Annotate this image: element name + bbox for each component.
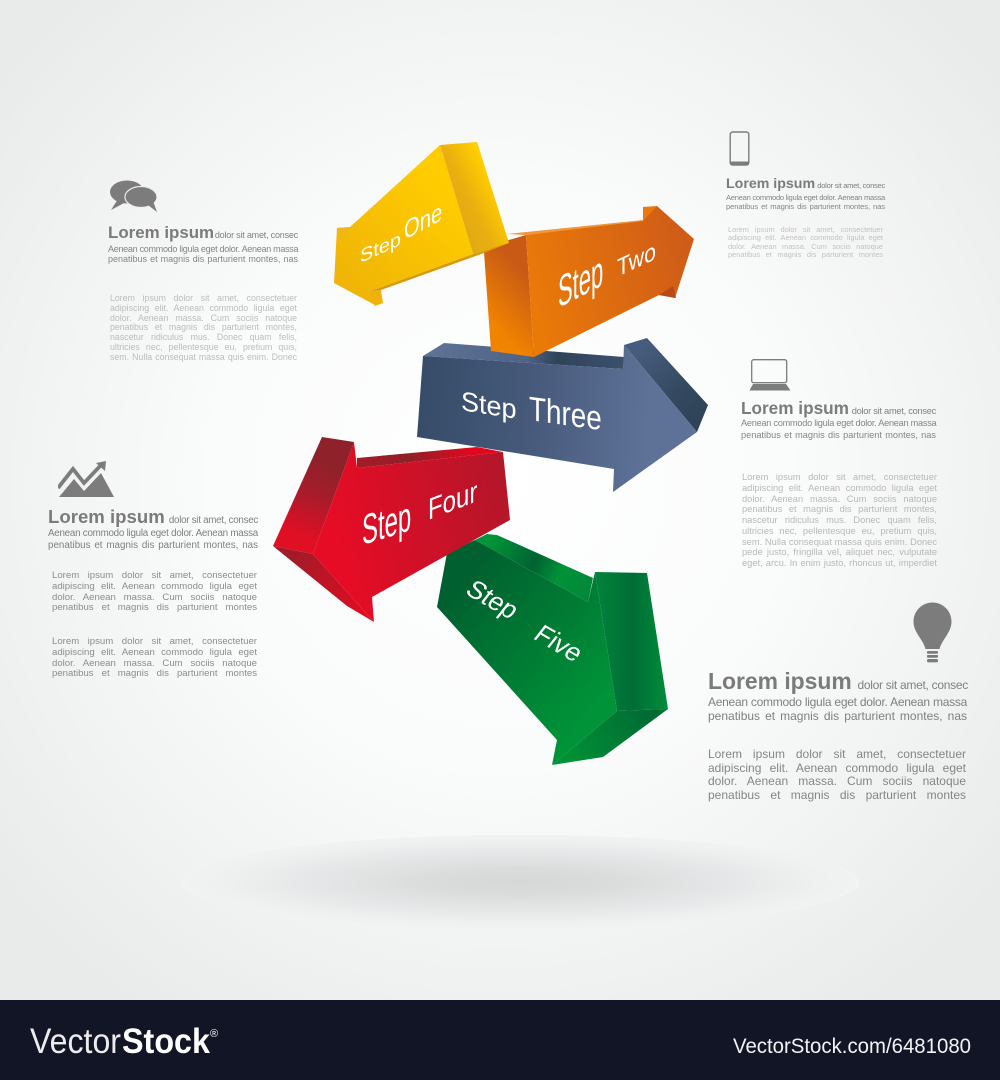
body text: penatibus et magnis dis parturient montes (52, 668, 257, 679)
heading (741, 398, 936, 418)
intro text (48, 528, 258, 551)
body text: penatibus et magnis dis parturient montes (708, 788, 966, 802)
text block: light bulb (708, 602, 968, 802)
icon: mountain chart (58, 461, 114, 497)
label: step three: Step (461, 385, 517, 425)
body text: adipiscing elit. Aenean commodo ligula eget (110, 303, 297, 313)
body text: adipiscing elit. Aenean commodo ligula eget (708, 761, 966, 775)
body text: nascetur ridiculus mus. Donec quam felis, (742, 515, 937, 525)
text block: phone (726, 131, 886, 259)
text block: laptop (741, 359, 937, 568)
body text: Lorem ipsum dolor sit amet, consectetuer (110, 293, 297, 303)
body text: adipiscing elit. Aenean commodo ligula eget (728, 233, 883, 242)
label: step two: Two (617, 237, 656, 283)
body text: Lorem ipsum dolor sit amet, consectetuer (52, 636, 257, 647)
footer logo and image id: Stock (122, 1022, 210, 1061)
heading (48, 506, 258, 527)
icon: speech bubbles (110, 180, 157, 212)
heading (108, 223, 298, 242)
intro text: Aenean commodo ligula eget dolor. Aenean massa (108, 244, 298, 254)
body text: dolor. Aenean massa. Cum sociis natoque (708, 774, 966, 788)
intro text (726, 193, 886, 210)
label: step three (461, 385, 602, 438)
label: step three: Three (529, 390, 602, 438)
body text: Lorem ipsum dolor sit amet, consectetuer (708, 747, 966, 761)
body text: ultricies nec, pellentesque eu, pretium quis, (110, 342, 297, 352)
body text: adipiscing elit. Aenean commodo ligula eget (52, 647, 257, 658)
label: step four (362, 474, 477, 555)
body text (110, 293, 297, 362)
intro text: penatibus et magnis dis parturient montes, nas (48, 540, 258, 551)
heading: Lorem ipsum (741, 398, 849, 418)
body text: adipiscing elit. Aenean commodo ligula eget (52, 581, 257, 592)
heading: dolor sit amet, consec (215, 230, 298, 240)
label: step one: One (404, 197, 442, 246)
icon: phone (730, 131, 750, 166)
body text: dolor. Aenean massa. Cum sociis natoque (728, 242, 883, 251)
arrow: step three (417, 338, 708, 492)
body text: pede justo, fringilla vel, aliquet nec, vulputate (742, 547, 937, 557)
intro text: penatibus et magnis dis parturient montes, nas (726, 202, 885, 210)
body text (52, 636, 257, 679)
label: step four: Four (428, 474, 477, 526)
body text: eget, arcu. In enim justo, rhoncus ut, imperdiet (742, 558, 937, 568)
intro text (108, 244, 298, 264)
icon: light bulb (914, 602, 952, 662)
body text: dolor. Aenean massa. Cum sociis natoque (52, 658, 257, 669)
heading: Lorem ipsum (48, 506, 165, 527)
intro text: Aenean commodo ligula eget dolor. Aenean massa (741, 418, 936, 428)
body text (728, 225, 883, 259)
intro text: penatibus et magnis dis parturient montes, nas (108, 254, 298, 264)
text block: chart (48, 461, 258, 679)
label: step two: Step (558, 245, 603, 318)
arrow: step one (334, 142, 509, 306)
icon: laptop (750, 359, 790, 390)
body text: nascetur ridiculus mus. Donec quam felis, (110, 332, 297, 342)
heading: Lorem ipsum (108, 223, 214, 242)
intro text (741, 418, 937, 440)
body text: adipiscing elit. Aenean commodo ligula eget (742, 483, 937, 493)
body text (52, 570, 257, 613)
heading: dolor sit amet, consec (169, 515, 258, 526)
body text: Lorem ipsum dolor sit amet, consectetuer (52, 570, 257, 581)
footer logo and image id: VectorStock.com/6481080 (733, 1035, 971, 1058)
body text: penatibus et magnis dis parturient montes, (110, 322, 297, 332)
heading: Lorem ipsum (726, 176, 815, 192)
arrow: step two (484, 206, 694, 357)
heading (726, 176, 885, 192)
footer logo and image id (30, 1022, 971, 1061)
heading: dolor sit amet, consec (852, 406, 936, 416)
label: step one (360, 197, 442, 268)
body text: dolor. Aenean massa. Cum sociis natoque (110, 313, 297, 323)
body text: penatibus et magnis dis parturient montes, (742, 504, 937, 514)
label: step five (460, 574, 589, 667)
heading: dolor sit amet, consec (857, 678, 968, 692)
body text: penatibus et magnis dis parturient montes (728, 250, 883, 259)
intro text (708, 695, 968, 723)
label: step five: Step (460, 574, 525, 624)
intro text: penatibus et magnis dis parturient montes, nas (741, 430, 936, 440)
label: step five: Five (528, 619, 589, 667)
body text: sem. Nulla consequat massa quis enim. Donec (742, 536, 937, 546)
arrow: step five (437, 534, 668, 765)
body text: dolor. Aenean massa. Cum sociis natoque (52, 592, 257, 603)
text block: speech bubbles (108, 180, 298, 362)
label: step two (558, 237, 656, 318)
label: step one: Step (360, 228, 401, 268)
body text (708, 747, 966, 802)
intro text: Aenean commodo ligula eget dolor. Aenean massa (48, 528, 258, 539)
label: step four: Step (362, 494, 411, 555)
heading (708, 668, 968, 694)
arrow: step four (273, 437, 510, 622)
heading: dolor sit amet, consec (817, 181, 885, 190)
body text: penatibus et magnis dis parturient montes (52, 602, 257, 613)
body text: Lorem ipsum dolor sit amet, consectetuer (742, 472, 937, 482)
body text: Lorem ipsum dolor sit amet, consectetuer (728, 225, 883, 234)
intro text: penatibus et magnis dis parturient montes, nas (708, 709, 967, 723)
footer bar (0, 1000, 1000, 1080)
body text (742, 472, 937, 568)
heading: Lorem ipsum (708, 668, 852, 694)
floor shadow (181, 835, 859, 929)
footer logo and image id: Vector (30, 1022, 121, 1061)
body text: dolor. Aenean massa. Cum sociis natoque (742, 494, 937, 504)
intro text: Aenean commodo ligula eget dolor. Aenean massa (708, 695, 967, 709)
body text: ultricies nec, pellentesque eu, pretium quis, (742, 526, 937, 536)
body text: sem. Nulla consequat massa quis enim. Donec (110, 352, 297, 362)
footer logo and image id: ® (210, 1028, 218, 1040)
intro text: Aenean commodo ligula eget dolor. Aenean massa (726, 193, 885, 202)
